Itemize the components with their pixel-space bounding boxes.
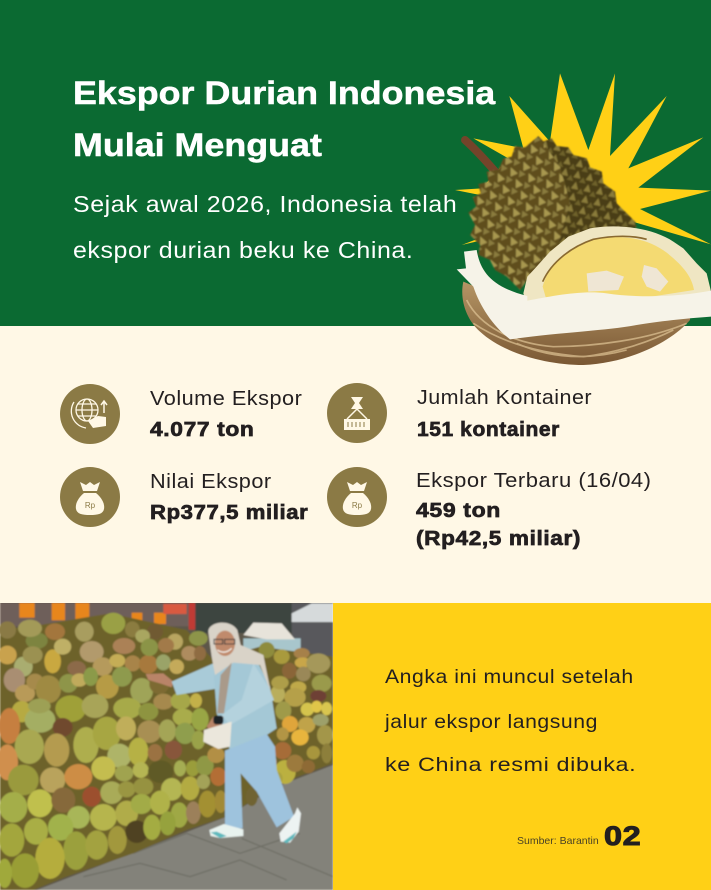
panel: yellow note (333, 603, 711, 890)
subtitle: ekspor durian beku ke China. (73, 237, 413, 263)
icon: basket (462, 282, 690, 365)
icon: globe export (60, 384, 120, 444)
photo: woman beside durian pile (0, 603, 333, 890)
stat: ekspor terbaru (327, 467, 652, 550)
stat: ekspor terbaru: Ekspor Terbaru (16/04) (416, 470, 652, 492)
icon: money bag (327, 467, 387, 527)
icon: durian stem (465, 140, 497, 174)
stat: ekspor terbaru: 459 ton (416, 500, 501, 522)
panel: stats (60, 383, 652, 550)
icon: container crane (327, 383, 387, 443)
source: Sumber: Barantin (517, 835, 599, 847)
woman (146, 623, 301, 843)
illustration: durian basket with starburst (455, 74, 711, 365)
icon: whole durian (468, 136, 637, 290)
icon: money bag (60, 467, 120, 527)
icon: starburst (455, 73, 711, 245)
subtitle: Sejak awal 2026, Indonesia telah (73, 191, 457, 217)
subtitle (73, 191, 457, 263)
icon: cut durian (523, 226, 711, 303)
stat: nilai ekspor (60, 467, 308, 527)
background stalls (0, 603, 333, 660)
stat: nilai ekspor: Rp377,5 miliar (150, 502, 308, 524)
durian pile (0, 613, 333, 890)
title (73, 75, 496, 163)
panel: green header (0, 0, 711, 326)
text: note: Angka ini muncul setelah (385, 666, 634, 688)
title: Ekspor Durian Indonesia (73, 75, 495, 111)
page number: 02 (604, 821, 641, 851)
text: note: jalur ekspor langsung (385, 711, 598, 733)
stat: jumlah kontainer: Jumlah Kontainer (417, 387, 592, 409)
title: Mulai Menguat (73, 127, 322, 163)
stat: volume ekspor (60, 384, 302, 444)
icon: money bag: Rp (85, 501, 96, 510)
stat: volume ekspor: Volume Ekspor (150, 388, 302, 410)
icon: money bag: Rp (352, 501, 363, 510)
stat: jumlah kontainer (327, 383, 592, 443)
text: note (384, 666, 636, 776)
text: note: ke China resmi dibuka. (385, 754, 636, 776)
icon: white cloth (457, 250, 711, 339)
stat: nilai ekspor: Nilai Ekspor (150, 471, 272, 493)
stat: ekspor terbaru: (Rp42,5 miliar) (416, 528, 581, 550)
stat: jumlah kontainer: 151 kontainer (417, 419, 560, 441)
stat: volume ekspor: 4.077 ton (150, 419, 254, 441)
ground (37, 765, 333, 890)
